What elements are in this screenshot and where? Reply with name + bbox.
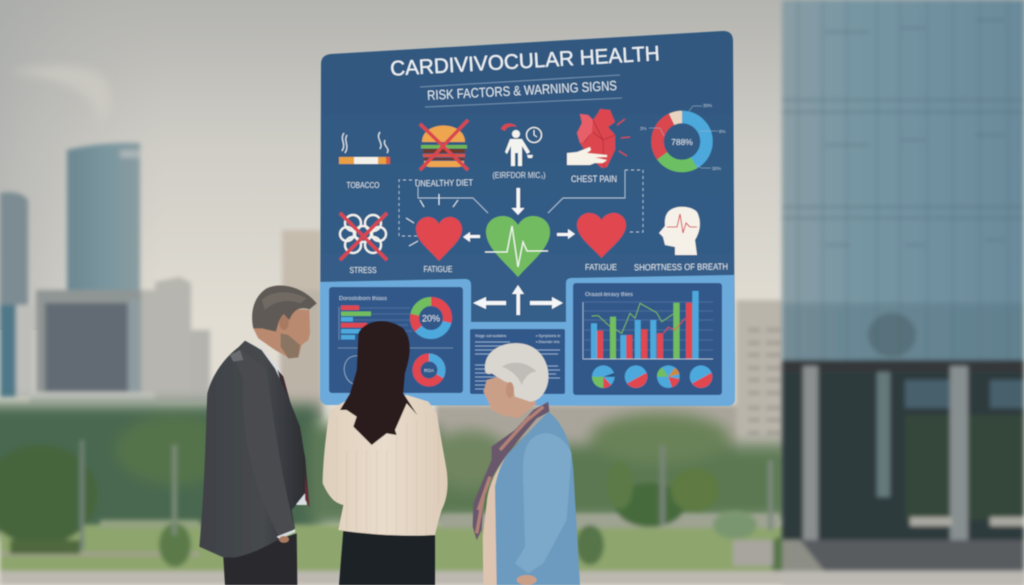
panel background (320, 31, 735, 406)
icon: crossed-out burger (420, 120, 468, 170)
building: glass tower at right (782, 0, 1024, 585)
face and neck (483, 373, 537, 418)
pie chart 3 (657, 365, 680, 388)
label: fatigue right: FATIGUE (585, 262, 617, 272)
donut chart: bottom: ROA (424, 368, 434, 373)
chart: top-right donut: 8% (719, 129, 726, 134)
panel: center text block: ▪ Symptoms in (536, 334, 560, 338)
subtitle rules (420, 75, 622, 107)
pie chart 1 (592, 365, 615, 388)
icon: central green heart (485, 216, 550, 277)
panel: infographic board (199, 31, 735, 585)
label: shortness of breath: SHORTNESS OF BREATH (634, 262, 728, 272)
cardigan sleeve (515, 433, 572, 573)
person: man in dark suit (199, 285, 317, 585)
icon: tobacco cigarette (339, 132, 390, 164)
tie (277, 369, 309, 507)
chart: top-right donut: 3% (640, 126, 647, 131)
icon: right red heart (577, 213, 626, 258)
person: woman in cream sweater (323, 321, 448, 585)
pie chart 2 (625, 365, 647, 388)
ear (279, 315, 289, 330)
beige top (483, 450, 510, 585)
donut chart: 20 percent: 20% (422, 314, 440, 324)
icon: head with pulse (659, 207, 700, 255)
right dashboard heading: Oraast-teravy thies (585, 292, 633, 298)
panel: center text block: Stage out sustains (475, 334, 506, 338)
dashed connectors (399, 170, 643, 236)
sweater (323, 395, 448, 536)
blue cardigan (495, 412, 580, 585)
label: fatigue left: FATIGUE (424, 264, 453, 274)
suit jacket (199, 341, 305, 557)
ear (506, 382, 514, 398)
chart: top-right donut: 30% (703, 103, 712, 108)
arrow: left in lower section (473, 297, 506, 309)
label: stress: STRESS (350, 265, 377, 275)
panel: left dashboard (329, 287, 463, 393)
beard (281, 333, 300, 358)
title: CARDIVIVOCULAR HEALTH (390, 42, 660, 81)
arrow: down to heart (512, 188, 524, 215)
white hair (485, 343, 549, 402)
pie chart 4 (690, 365, 712, 388)
label: person caption: (EIRFDOR MIC₃) (492, 170, 546, 180)
arrow: right to red heart (557, 229, 575, 239)
sleeve and shoulder highlight (232, 350, 295, 537)
panel: center text block (470, 329, 565, 394)
arrow: left to red heart (463, 232, 480, 242)
neck and face (253, 308, 310, 358)
icon: person with clock (501, 123, 542, 166)
black trousers (339, 531, 435, 585)
scarf (473, 402, 549, 540)
label: tobacco: TOBACCO (346, 180, 380, 190)
arrow: up in lower section (512, 285, 524, 315)
grouped bar and line chart (583, 291, 713, 359)
icon: left red heart with rays (406, 194, 462, 261)
lower light-blue band (320, 275, 735, 406)
chart: top-right donut: 788% (671, 137, 693, 147)
arrow: right in lower section (530, 297, 563, 309)
chart: top-right donut (640, 103, 726, 171)
chart: top-right donut: 30% (712, 166, 721, 171)
icon: anatomical heart with hand (567, 109, 630, 168)
long dark hair (340, 321, 417, 445)
hand (517, 575, 537, 585)
hand (279, 536, 289, 543)
shirt and collar (247, 338, 307, 505)
person: older woman with scarf (473, 343, 580, 585)
panel: right dashboard (573, 283, 722, 395)
label: chest pain: CHEST PAIN (571, 174, 617, 184)
subtitle: RISK FACTORS & WARNING SIGNS (427, 78, 617, 103)
icon: head outline (344, 356, 366, 385)
hair (252, 285, 317, 332)
icon: crossed-out stress knot (340, 213, 387, 260)
horizontal bar chart (339, 306, 412, 340)
trousers (223, 533, 297, 585)
left dashboard heading: Dorostoborn thiass (339, 296, 387, 302)
label: unhealthy diet: UNEALTHY DIET (415, 177, 473, 189)
panel: center text block: ▪ Disorder mic (536, 340, 560, 344)
